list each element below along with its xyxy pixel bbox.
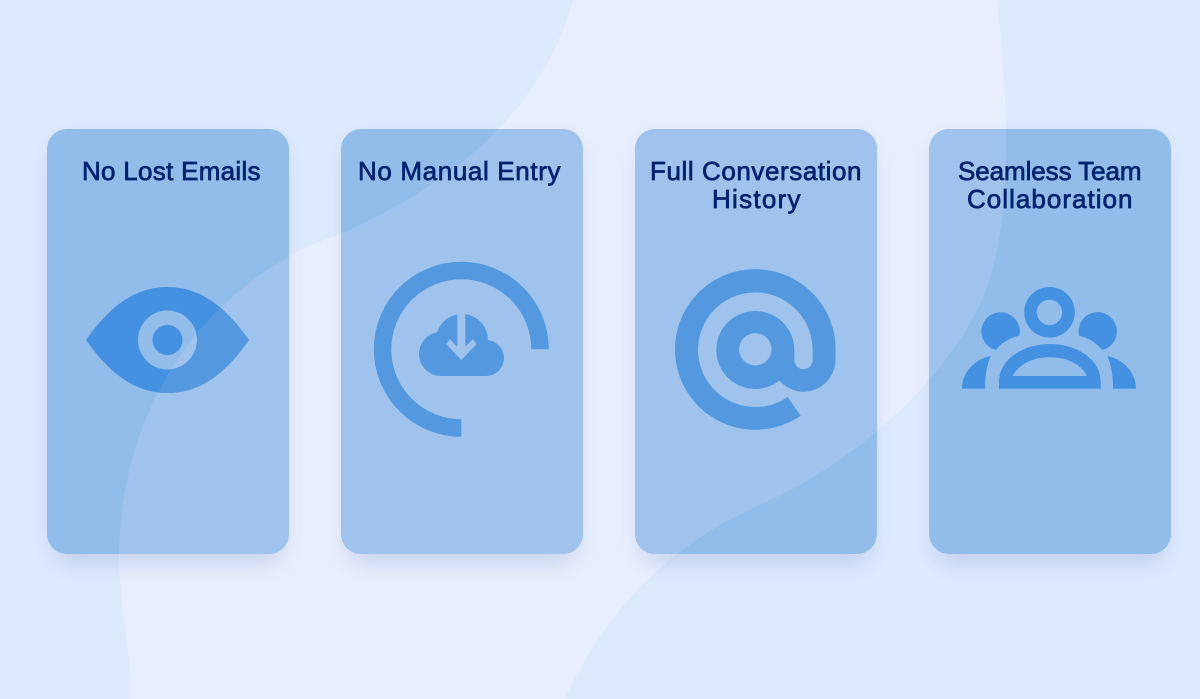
icon: at sign [675,269,836,430]
icon: eye [86,287,249,393]
panel: No Lost Emails [47,129,289,564]
heading: Full Conversation History [650,156,862,214]
panel: Seamless Team Collaboration [929,129,1171,564]
icon: cloud download in progress ring [383,271,540,428]
heading: Full Conversation History: Full Conversation [650,156,862,186]
heading: Seamless Team Collaboration: Collaboration [967,184,1132,214]
icon: team of people [962,287,1136,389]
heading: No Manual Entry: No Manual Entry [358,156,560,186]
heading: Full Conversation History: History [712,184,800,214]
panel: No Manual Entry [341,129,583,564]
heading: Seamless Team Collaboration [958,156,1142,214]
heading: Seamless Team Collaboration: Seamless Team [958,156,1142,186]
heading: No Lost Emails: No Lost Emails [82,156,260,186]
panel: Full Conversation History [635,129,877,564]
